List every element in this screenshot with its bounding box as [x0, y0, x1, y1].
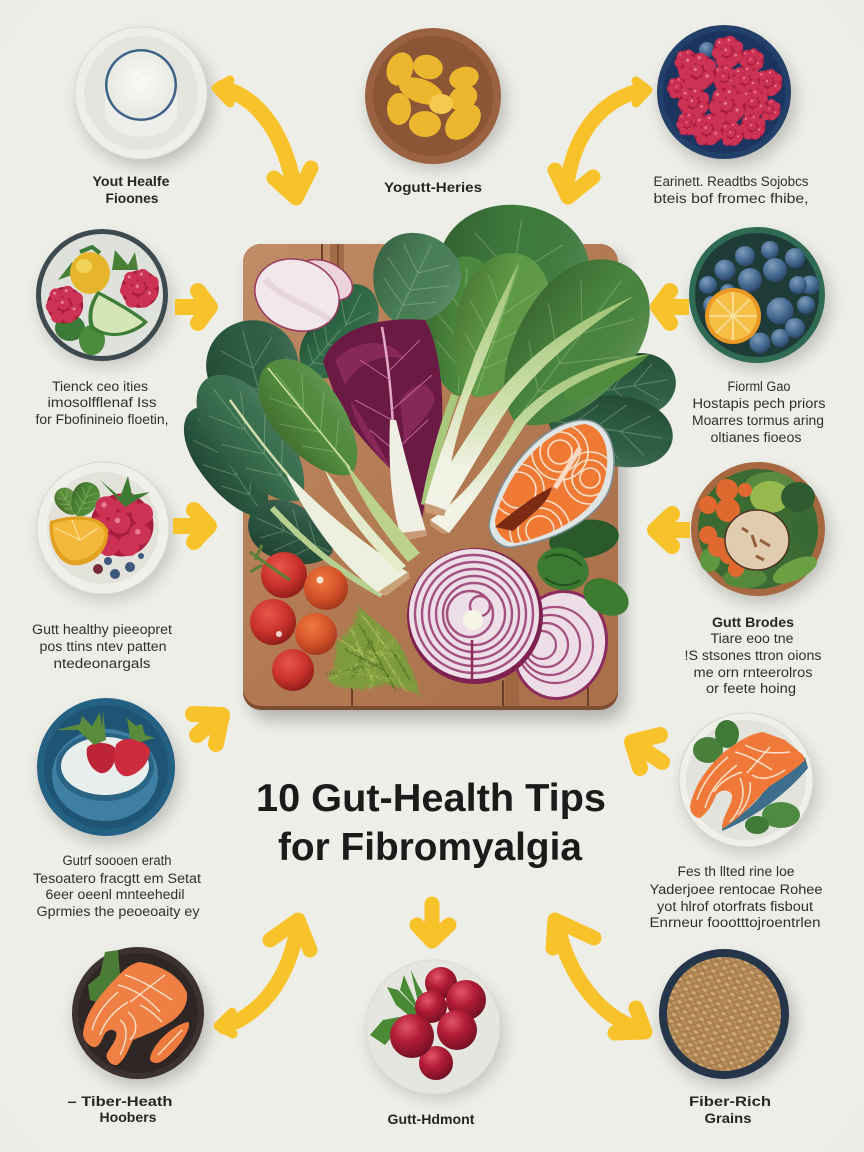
label: plate 9: Fes th llted rine loe	[678, 864, 794, 879]
label: plate 5: Hostapis pech priors	[692, 396, 826, 411]
label: plate 7: me orn rnteerolros	[694, 665, 813, 680]
label: plate 8: Gutrf soooen erath	[62, 853, 172, 868]
label: plate 4: imosolfflenaf Iss	[48, 395, 157, 410]
radish slice	[245, 247, 359, 343]
label: plate 12: Fiber-Rich	[689, 1093, 771, 1109]
label: plate 4: for Fbofinineio floetin,	[36, 412, 168, 427]
label: plate 7: or feete hoing	[706, 681, 796, 696]
title: 10 Gut-Health Tips	[256, 777, 606, 820]
wooden cutting board	[243, 244, 618, 710]
onion slices	[407, 548, 618, 709]
arrow: right row 3	[655, 514, 690, 546]
arrow: bottom-right curved	[553, 920, 645, 1033]
label: plate 7: Gutt Brodes	[712, 614, 794, 630]
plate 5: blueberries with orange	[689, 227, 830, 369]
arrow: left row 4	[193, 714, 222, 744]
label: plate 3: Earinett. Readtbs Sojobcs	[654, 174, 809, 189]
plate 11: cherries	[366, 960, 505, 1099]
label: plate 5: oltianes fioeos	[710, 430, 802, 445]
label: plate 9: yot hlrof otorfrats fisbout	[657, 899, 813, 914]
arrow: bottom-left curved	[218, 920, 310, 1034]
arrow: bottom-centre	[417, 904, 449, 941]
label: plate 1: Fioones	[106, 190, 159, 206]
label: plate 5: Fiorml Gao	[728, 379, 790, 394]
label: plate 1: Yout Healfe	[92, 173, 170, 189]
label: plate 8: 6eer oeenl mnteehedil	[46, 887, 184, 902]
label: plate 10: – Tiber-Heath	[68, 1093, 172, 1109]
label: plate 3: bteis bof fromec fhibe,	[654, 191, 808, 206]
plate 6: raspberry and orange	[37, 462, 174, 600]
title: for Fibromyalgia	[278, 826, 582, 869]
plate 1: yogurt cup	[75, 27, 213, 166]
label: plate 12: Grains	[704, 1110, 752, 1126]
label: plate 6: Gutt healthy pieeopret	[32, 622, 172, 637]
green peppers	[532, 515, 635, 623]
label: plate 6: ntedeonargals	[54, 656, 151, 671]
back leaves	[169, 195, 681, 579]
label: plate 2: Yogutt-Heries	[384, 179, 482, 195]
arrows	[173, 80, 690, 1034]
plate 7: mixed vegetable bowl	[691, 462, 830, 603]
arrow: left row 3	[173, 510, 209, 542]
arrow: top-left curved	[216, 80, 311, 198]
title	[256, 777, 606, 869]
central illustration: cutting board with vegetables and salmon	[169, 195, 681, 720]
arrow: top-right curved	[555, 81, 648, 197]
plate 10: salmon in dark dish	[72, 947, 209, 1085]
radicchio leaf	[323, 319, 442, 541]
label: plate 9	[650, 864, 822, 930]
label: plate 9: Enrneur foootttojroentrlen	[650, 915, 820, 930]
arrow: right row 4	[632, 735, 662, 768]
arrow: left row 2	[175, 291, 210, 323]
label: plate 10: Hoobers	[100, 1109, 157, 1125]
label: plate 7: Tiare eoo tne	[710, 631, 794, 646]
label: plate 12	[689, 1093, 771, 1126]
plate 4: fruit and cucumber	[36, 229, 173, 367]
dill	[325, 606, 420, 695]
label: plate 8	[33, 853, 201, 919]
label: plate 6: pos ttins ntev patten	[40, 639, 166, 654]
label: plate 8: Gprmies the peoeoaity ey	[36, 904, 200, 919]
label: plate 5: Moarres tormus aring	[692, 413, 824, 428]
plate 3: raspberries bowl	[657, 25, 796, 166]
arrow: right row 2	[658, 291, 689, 323]
plate 9: salmon with herbs	[679, 713, 818, 853]
label: plate 4	[36, 379, 168, 427]
label: plate 3	[654, 174, 809, 206]
plate 2: yellow fruit bowl	[365, 28, 506, 169]
label: plate 6	[32, 622, 172, 671]
label: plate 11: Gutt-Hdmont	[388, 1111, 475, 1127]
label: plate 7	[684, 614, 822, 696]
label: plate 4: Tienck ceo ities	[52, 379, 148, 394]
tomatoes	[250, 545, 348, 691]
plate 12: whole grains	[659, 949, 795, 1085]
salmon steak	[489, 420, 616, 560]
mid-left leaves and stalks	[178, 343, 420, 596]
right stalks and leaves	[424, 234, 676, 534]
plate 8: yogurt with strawberries	[37, 698, 180, 843]
label: plate 5	[692, 379, 826, 445]
label: plate 1	[92, 173, 170, 206]
label: plate 10	[68, 1093, 172, 1125]
label: plate 8: Tesoatero fracgtt em Setat	[33, 871, 201, 886]
label: plate 7: !S stsones ttron oions	[684, 648, 822, 663]
label: plate 9: Yaderjoee rentocae Rohee	[650, 882, 822, 897]
